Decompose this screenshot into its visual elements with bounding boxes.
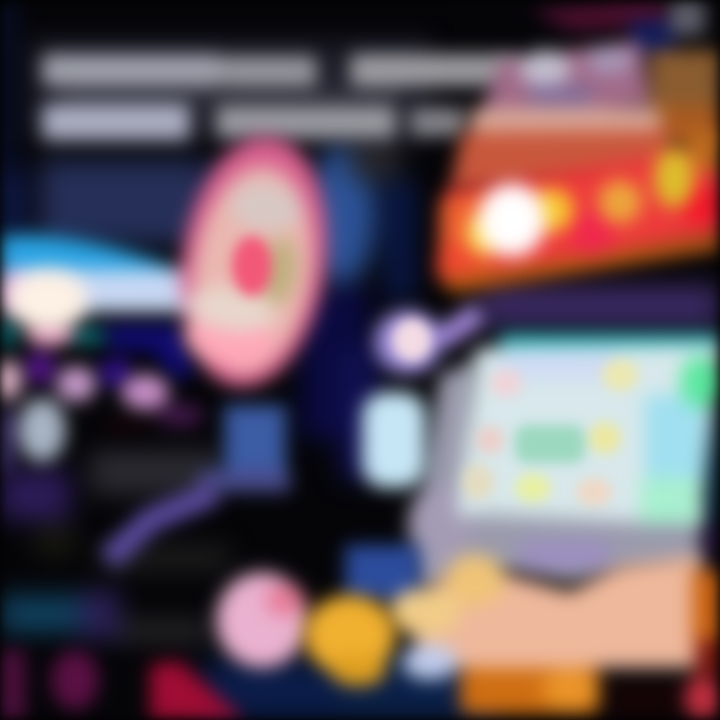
bright light [478,183,546,257]
gold coin [304,595,396,686]
target centre [232,236,272,296]
side glow [362,392,426,488]
machine frame [374,310,700,590]
blue pillar [200,405,290,492]
marquee red panel [436,130,720,294]
title text placeholder: illegible in reference [42,54,520,140]
marquee top [450,0,720,190]
left glowing cloud [0,235,270,385]
left purple machines [0,360,204,470]
casino marquee sign [436,0,720,294]
coins and chips tray [0,545,720,720]
pink chip [216,572,308,668]
reel symbols [462,359,638,506]
bottom red and magenta glows [0,650,245,720]
diagonal purple beam [108,492,215,560]
marquee lights [466,148,694,254]
reels screen [456,334,720,525]
light pull [392,318,432,362]
target ring [165,127,343,397]
slot machine [362,310,720,590]
